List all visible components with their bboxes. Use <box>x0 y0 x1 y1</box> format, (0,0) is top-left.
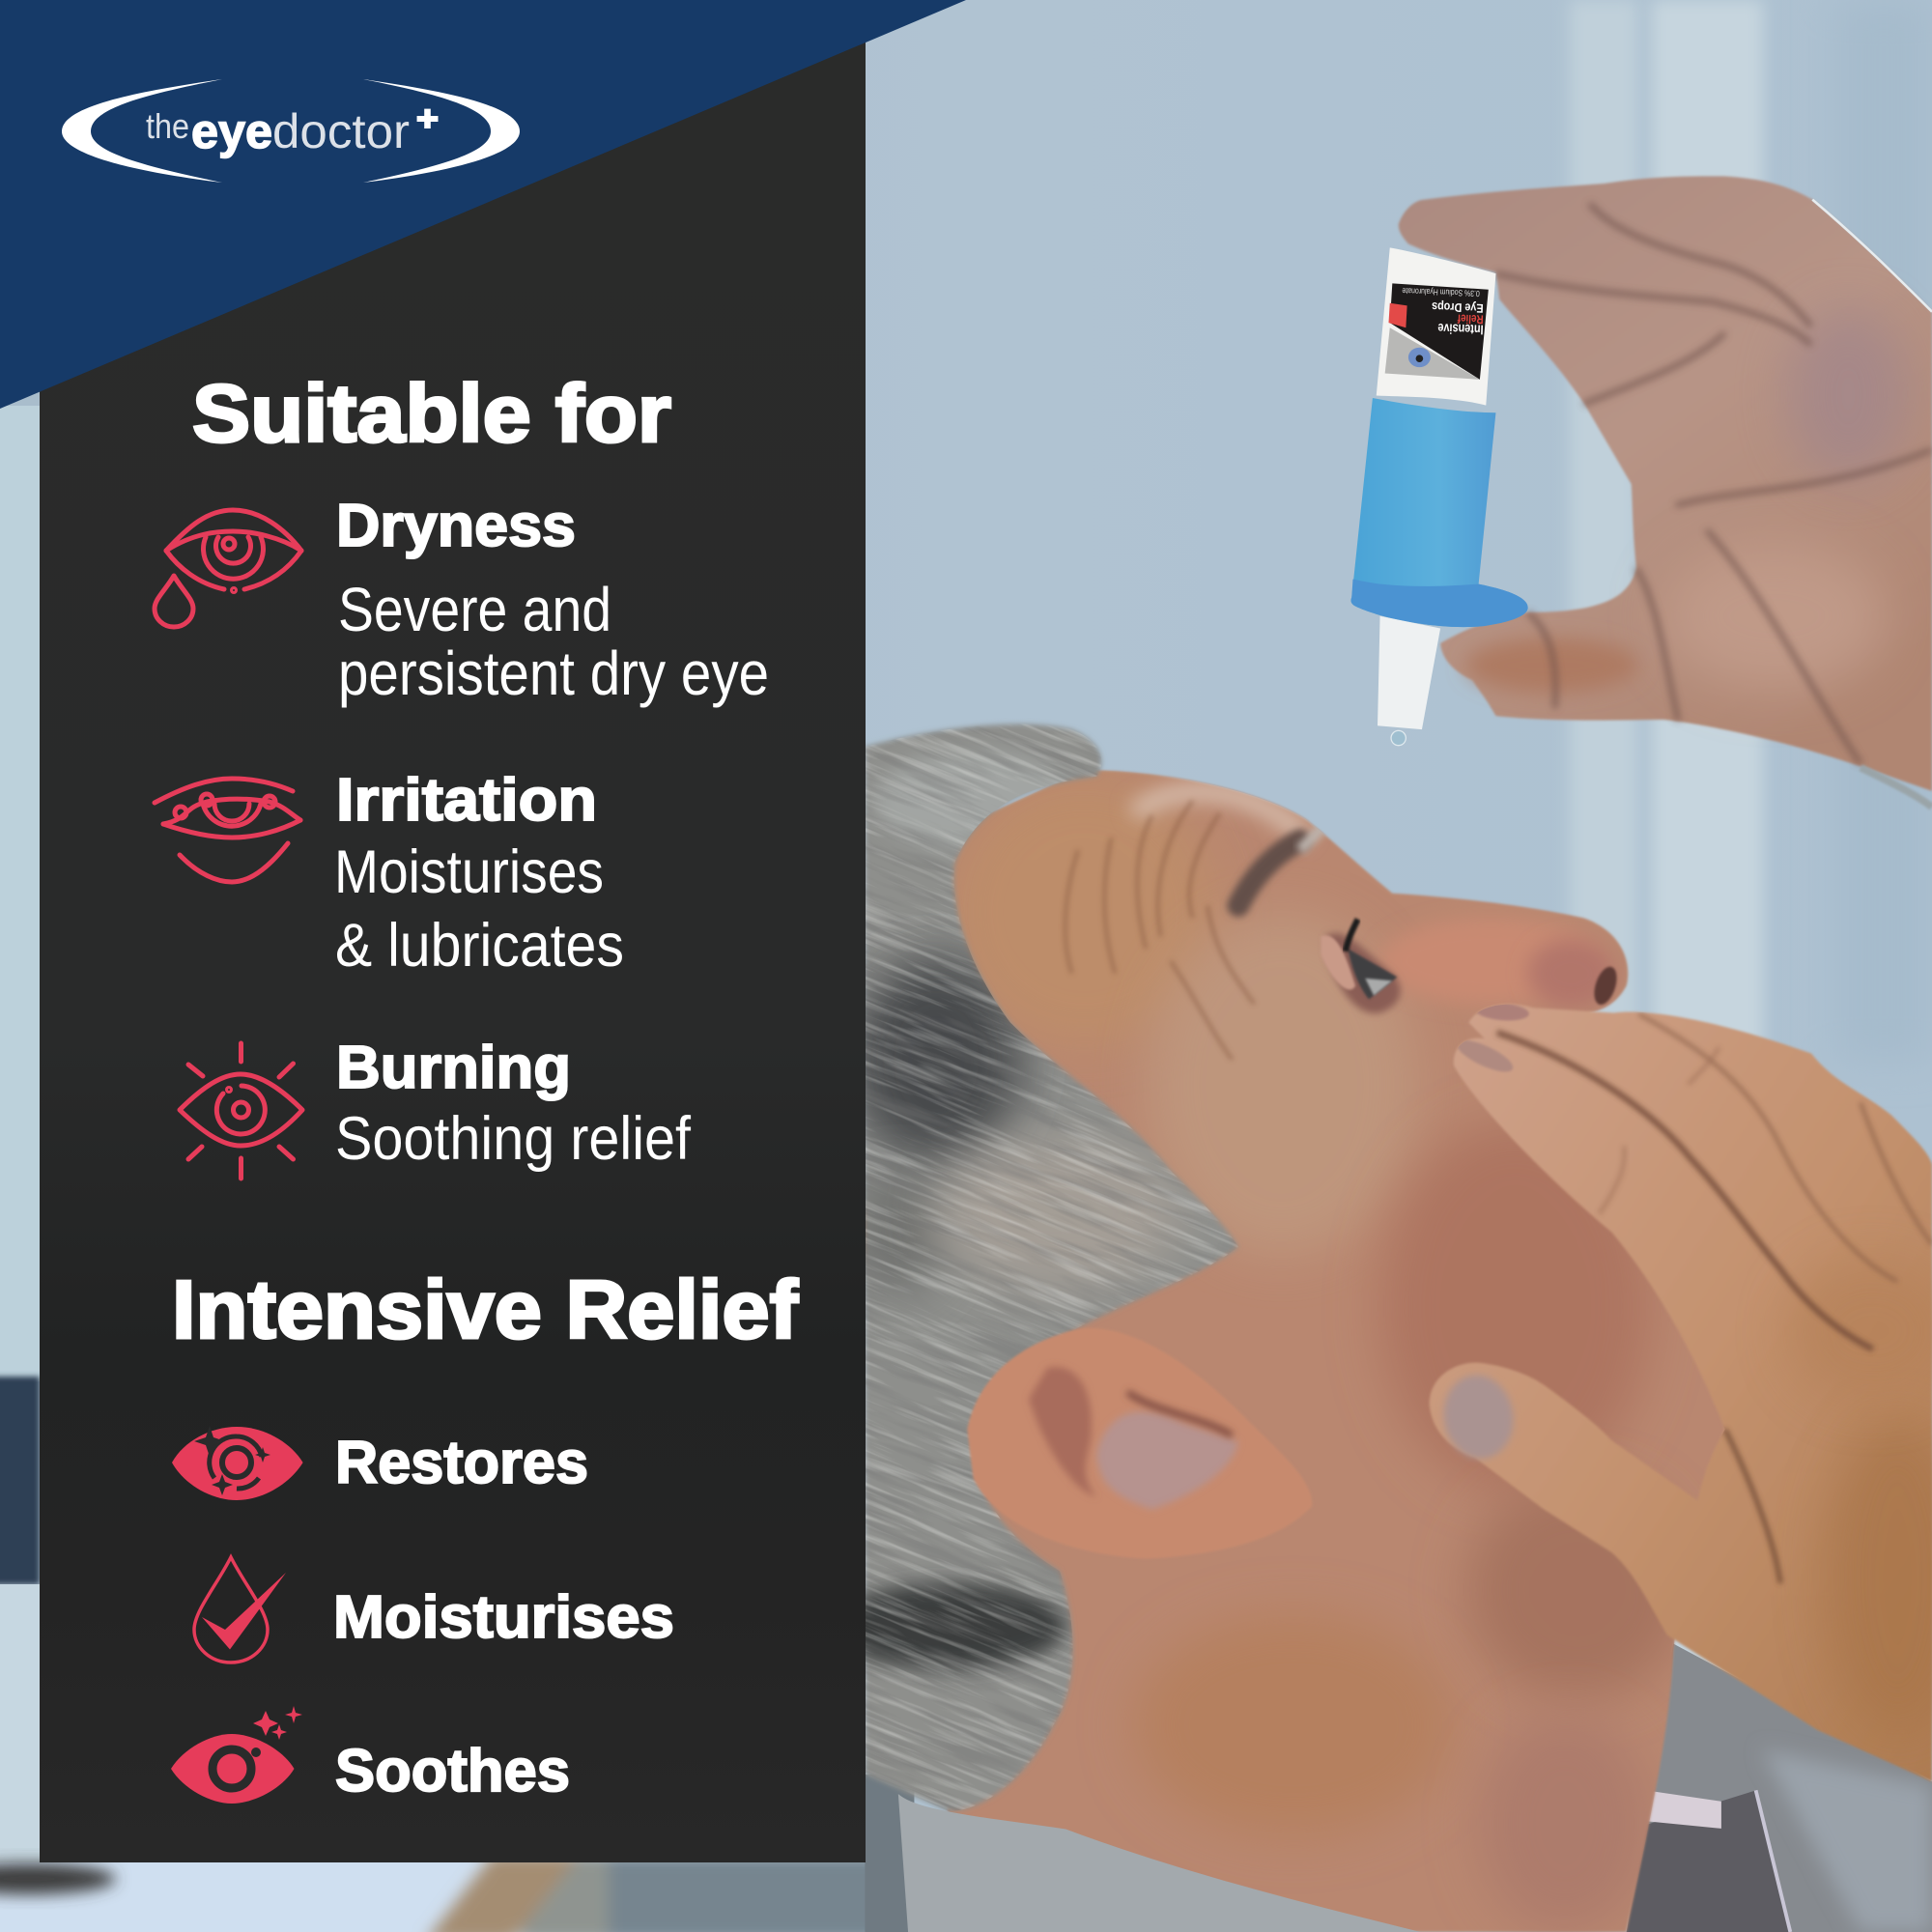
bottle label text: Relief <box>1457 312 1484 327</box>
item: Moisturises: Moisturises <box>333 1584 674 1651</box>
icon: drop with check mark <box>194 1557 286 1662</box>
upper hand holding bottle <box>1399 176 1932 807</box>
navy corner banner <box>0 0 966 409</box>
bottle label text: Eye Drops <box>1432 299 1484 316</box>
logo swooshes <box>62 79 222 183</box>
logo: the eye doctor plus <box>62 79 520 183</box>
item: Dryness: persistent dry eye <box>338 639 769 708</box>
icon: burning eye with rays <box>180 1043 302 1179</box>
item: Irritation: Moisturises <box>334 838 604 906</box>
item: Dryness: Severe and <box>338 575 611 644</box>
item: Restores <box>172 1426 588 1500</box>
item: Irritation: Irritation <box>336 767 597 834</box>
grey shoulder and jumper <box>865 1644 1932 1932</box>
item: Burning: Soothing relief <box>335 1105 691 1173</box>
bottle label text: Intensive <box>1437 321 1484 338</box>
bottle label text: 0.3% Sodium Hyaluronate <box>1402 286 1480 298</box>
item: Dryness <box>155 493 769 708</box>
lower hand touching face <box>1430 1001 1932 1781</box>
icon: solid eye with sparkles <box>172 1426 303 1500</box>
heading: Intensive Relief: Intensive Relief <box>172 1264 799 1356</box>
item: Irritation: & lubricates <box>335 912 624 980</box>
item: Moisturises <box>194 1557 674 1662</box>
item: Soothes <box>171 1706 570 1804</box>
logo: the eye doctor plus: eye <box>191 104 272 158</box>
grey hair <box>866 721 1239 1812</box>
item: Burning <box>180 1035 691 1179</box>
item: Burning: Burning <box>336 1035 571 1101</box>
bottle label text <box>1402 286 1484 338</box>
head skin <box>863 770 1749 1932</box>
heading: Suitable for: Suitable for <box>192 368 671 459</box>
dark text panel <box>40 29 866 1862</box>
ear <box>967 1328 1312 1559</box>
logo: the eye doctor plus: the <box>146 106 189 146</box>
icon: solid eye with stars <box>171 1706 302 1804</box>
item: Soothes: Soothes <box>335 1738 570 1804</box>
eye drop bottle <box>1351 247 1528 746</box>
icon: dry eye with tear <box>155 510 301 627</box>
item: Dryness: Dryness <box>336 493 576 559</box>
logo: the eye doctor plus: doctor <box>272 104 410 158</box>
logo: the eye doctor plus: + <box>416 99 439 138</box>
icon: irritated eye <box>155 779 300 882</box>
item: Restores: Restores <box>335 1430 588 1496</box>
collar <box>898 1794 1421 1932</box>
bottle cap label body <box>1377 247 1495 406</box>
drop <box>1391 730 1406 746</box>
item: Irritation <box>155 767 624 980</box>
thumb nail <box>1437 1370 1520 1464</box>
eye <box>1321 920 1401 1013</box>
